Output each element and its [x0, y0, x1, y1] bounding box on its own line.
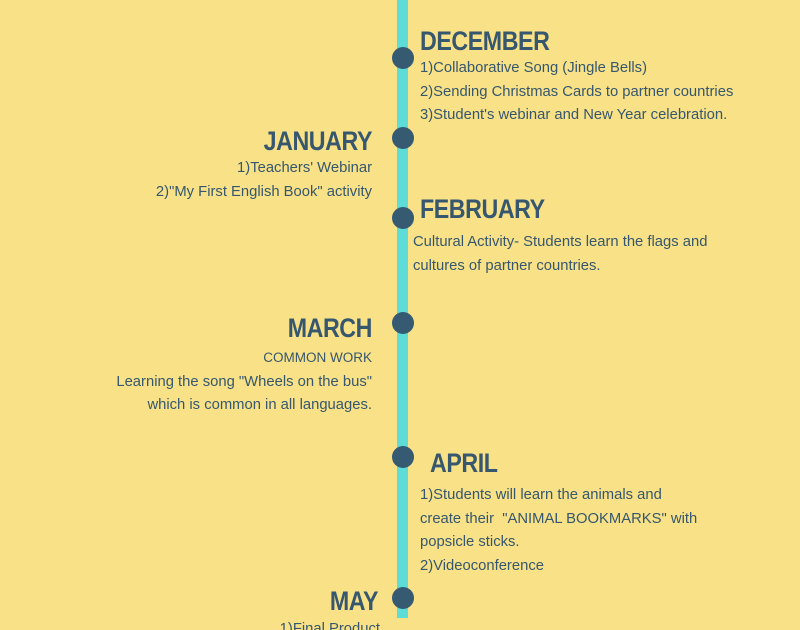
- heading: march: MARCH: [288, 313, 372, 343]
- text: march: Learning the song "Wheels on the bus": [116, 374, 372, 390]
- text: february: [413, 234, 707, 274]
- text: april: create their "ANIMAL BOOKMARKS" with: [420, 510, 697, 526]
- dot: december: [392, 47, 414, 69]
- text: april: 1)Students will learn the animals and: [420, 487, 662, 503]
- text: april: 2)Videoconference: [420, 558, 544, 574]
- timeline line: [397, 0, 408, 618]
- dot: february: [392, 207, 414, 229]
- text: january: [156, 160, 372, 200]
- text: december: 2)Sending Christmas Cards to partner countries: [420, 84, 733, 100]
- text: february: Cultural Activity- Students learn the flags and: [413, 234, 707, 250]
- dot: may: [392, 587, 414, 609]
- text: february: cultures of partner countries.: [413, 258, 601, 274]
- heading: february: FEBRUARY: [420, 194, 545, 224]
- dot: january: [392, 127, 414, 149]
- text: december: 3)Student's webinar and New Year celebration.: [420, 107, 727, 123]
- text: january: 1)Teachers' Webinar: [237, 160, 372, 176]
- text: december: 1)Collaborative Song (Jingle Bells): [420, 60, 647, 76]
- dot: march: [392, 312, 414, 334]
- heading: april: APRIL: [430, 448, 498, 478]
- dot: april: [392, 446, 414, 468]
- text: march: COMMON WORK: [263, 350, 372, 365]
- text: december: [420, 60, 733, 123]
- heading: january: JANUARY: [264, 126, 372, 156]
- text: march: [116, 350, 372, 413]
- heading: december: DECEMBER: [420, 26, 549, 56]
- text: april: popsicle sticks.: [420, 534, 520, 550]
- text: january: 2)"My First English Book" activity: [156, 184, 372, 200]
- heading: may: MAY: [330, 586, 378, 616]
- text: april: [420, 487, 697, 574]
- text: march: which is common in all languages.: [147, 397, 372, 413]
